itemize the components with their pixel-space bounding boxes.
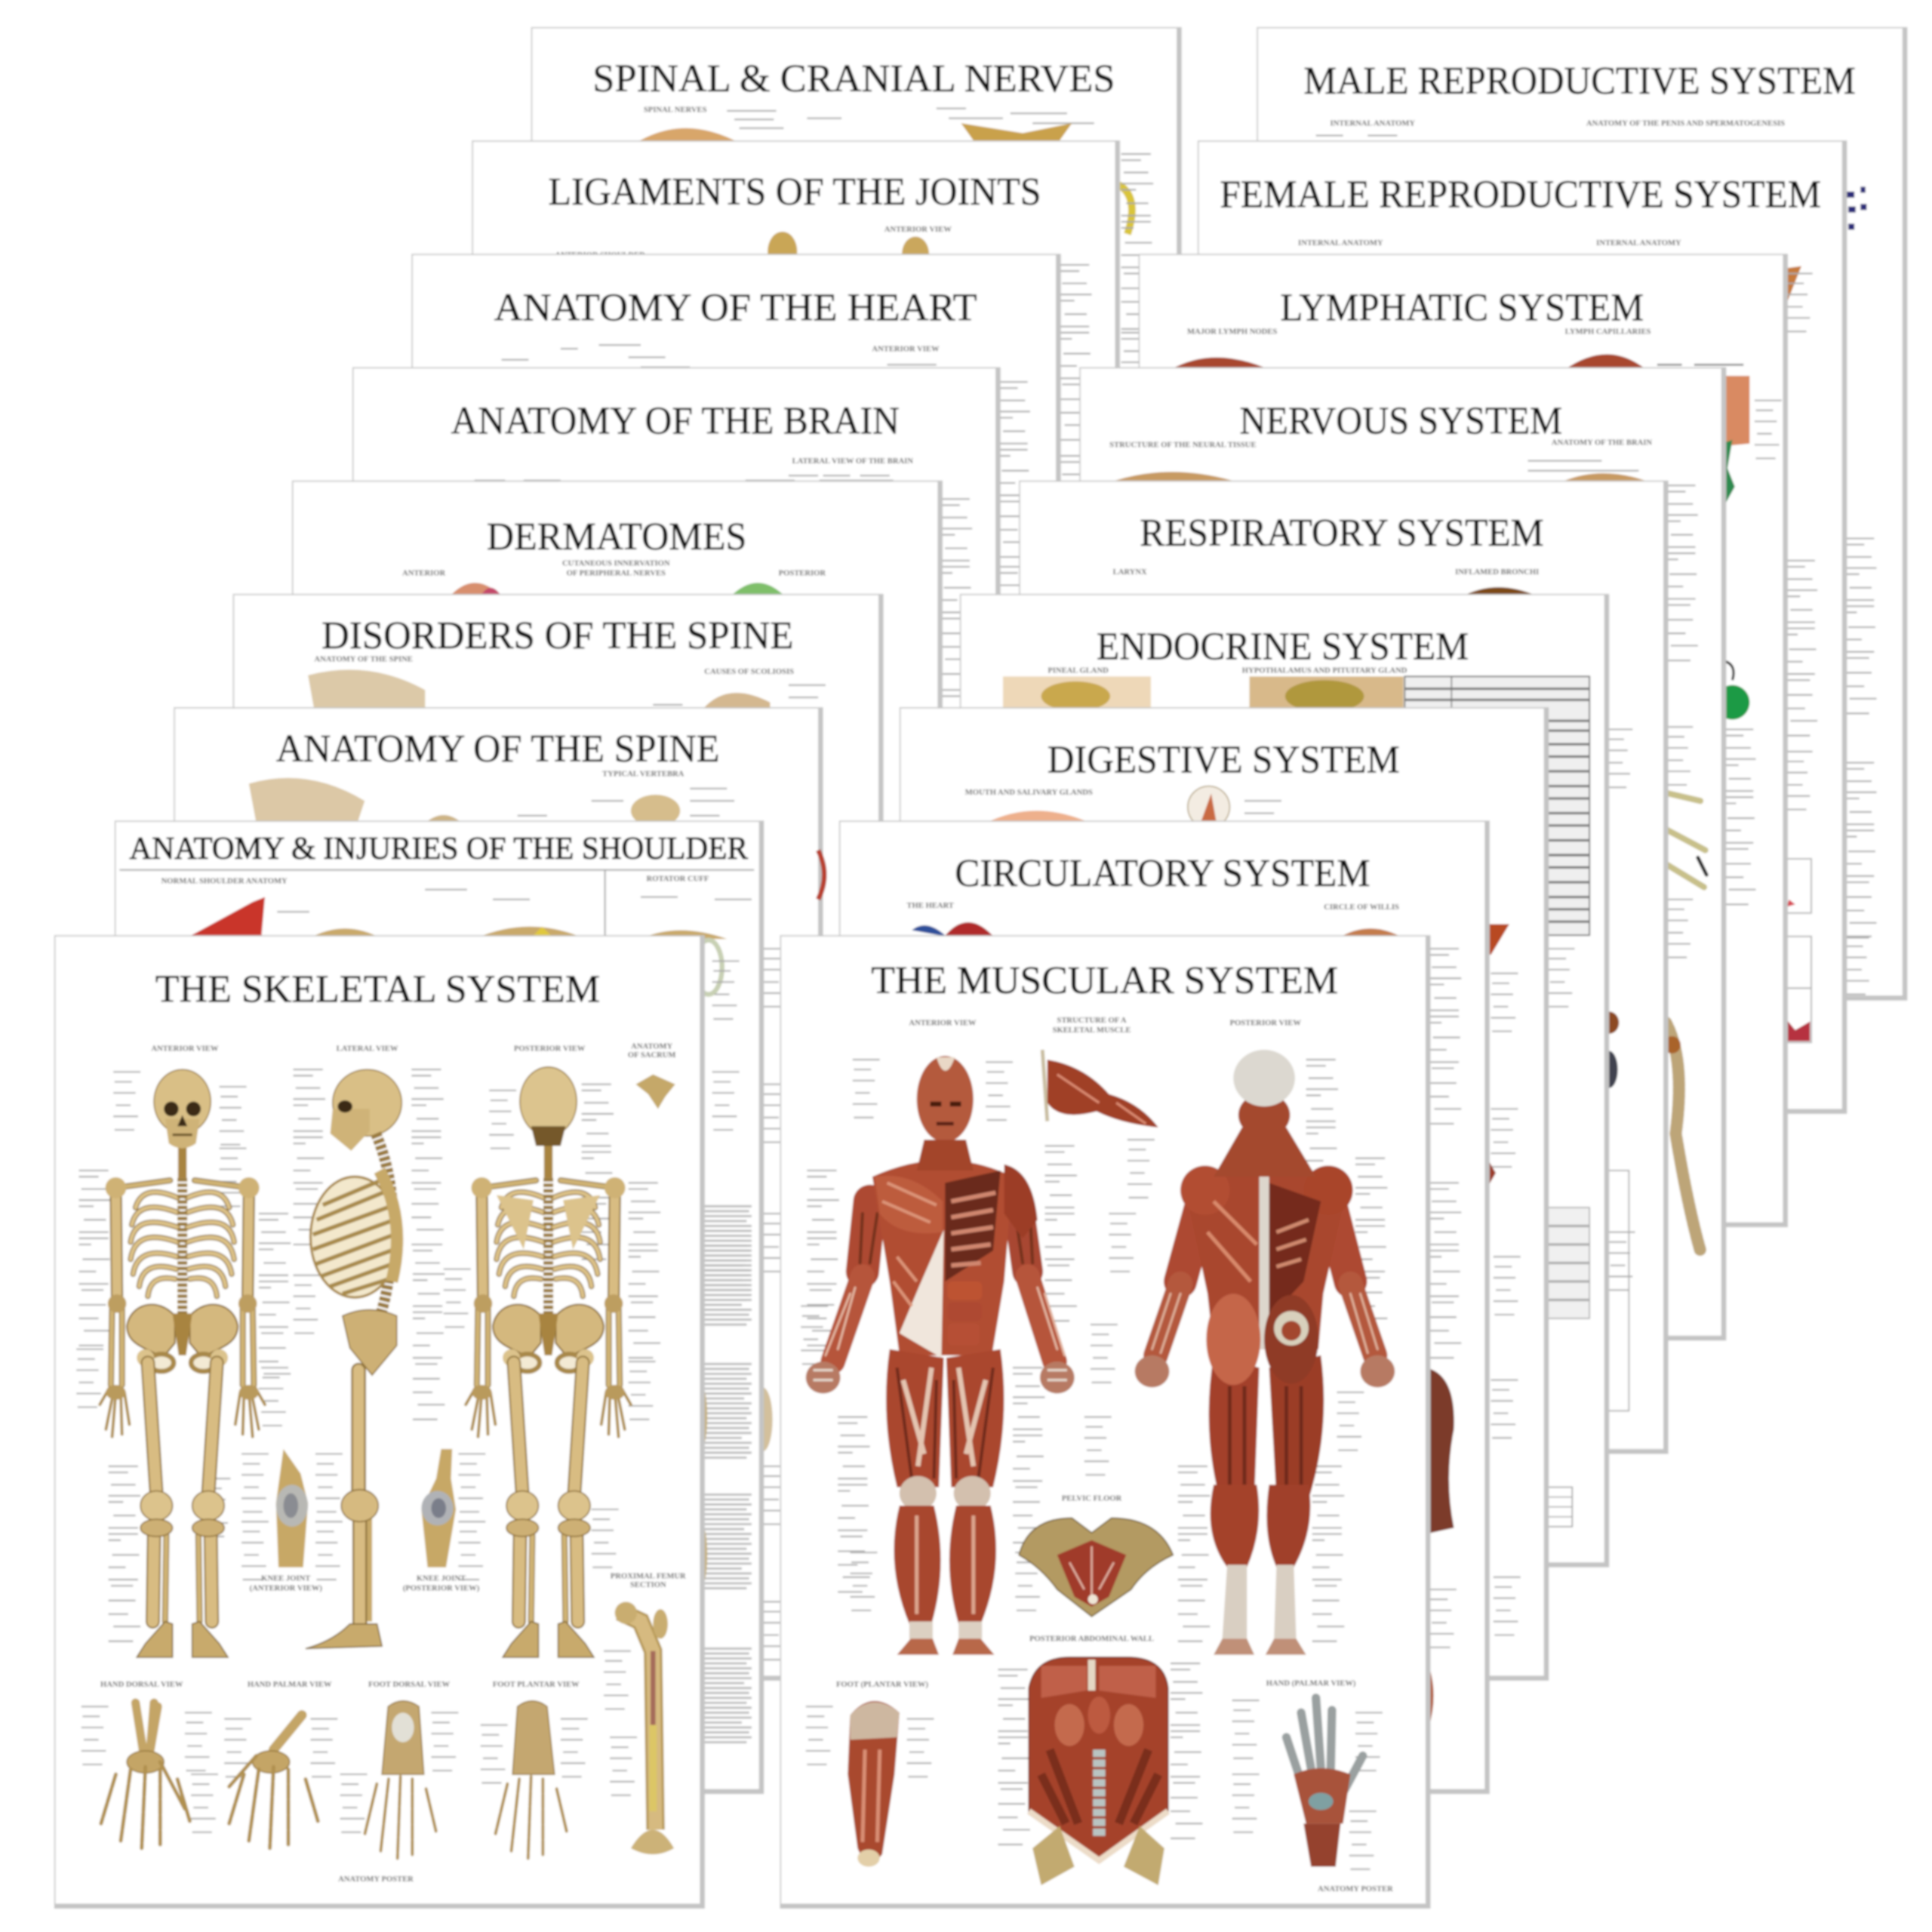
view label right: HYPOTHALAMUS AND PITUITARY GLAND [1242, 666, 1407, 675]
view label: ANATOMY OF THE SPINE [314, 656, 413, 664]
poster: anatomy of the spine [174, 707, 824, 1681]
poster: lymphatic system [1139, 254, 1788, 1227]
femur [615, 1601, 674, 1854]
poster: circulatory system [839, 820, 1490, 1794]
hand muscles [1286, 1698, 1363, 1866]
title: FEMALE REPRODUCTIVE SYSTEM [1220, 172, 1821, 216]
view headings: ANATOMY POSTER [1318, 1885, 1393, 1894]
view headings [100, 1042, 686, 1884]
title: DISORDERS OF THE SPINE [321, 614, 793, 657]
title: DIGESTIVE SYSTEM [1048, 738, 1400, 782]
view label right: ANATOMY OF THE BRAIN [1552, 438, 1652, 447]
hormone table [1404, 676, 1589, 935]
view headings: POSTERIOR ABDOMINAL WALL [1029, 1635, 1154, 1644]
muscle callout labels [801, 1060, 1387, 1869]
view headings: HAND PALMAR VIEW [248, 1681, 332, 1689]
title: LIGAMENTS OF THE JOINTS [549, 170, 1041, 214]
view headings: HAND DORSAL VIEW [100, 1681, 183, 1689]
view label: MAJOR LYMPH NODES [1187, 328, 1277, 336]
view headings: ANTERIOR VIEW [909, 1019, 977, 1027]
pelvic floor [1019, 1518, 1173, 1617]
muscle structure inset [1042, 1050, 1158, 1128]
title: LYMPHATIC SYSTEM [1280, 285, 1644, 329]
title: NERVOUS SYSTEM [1239, 399, 1562, 443]
title: RESPIRATORY SYSTEM [1140, 511, 1544, 555]
sacrum detail [635, 1075, 675, 1109]
title: ANATOMY OF THE HEART [494, 285, 977, 329]
view label: THE HEART [906, 902, 954, 910]
poster: digestive system [900, 707, 1549, 1681]
title: THE MUSCULAR SYSTEM [871, 958, 1338, 1002]
section label: NORMAL SHOULDER ANATOMY [162, 878, 288, 886]
poster: anatomy of the heart [411, 254, 1061, 1227]
view label: LARYNX [1113, 568, 1147, 577]
poster: endocrine system [960, 594, 1609, 1567]
view headings: ANATOMY [631, 1042, 673, 1051]
title: ENDOCRINE SYSTEM [1097, 624, 1469, 668]
title: SPINAL & CRANIAL NERVES [592, 57, 1115, 100]
view headings: ANTERIOR VIEW [151, 1045, 219, 1054]
view headings: POSTERIOR VIEW [1230, 1019, 1301, 1027]
view label: ANTERIOR SHOULDER [555, 251, 645, 260]
hand and foot bones [101, 1701, 567, 1858]
title: ANATOMY OF THE SPINE [276, 727, 719, 771]
view headings: SKELETAL MUSCLE [1053, 1026, 1131, 1035]
view headings: (POSTERIOR VIEW) [403, 1585, 480, 1593]
section label right: ROTATOR CUFF [647, 875, 709, 883]
title: ANATOMY OF THE BRAIN [451, 399, 900, 443]
view label: INTERNAL ANATOMY [1298, 239, 1383, 248]
view label right: ANATOMY OF THE PENIS AND SPERMATOGENESIS [1586, 120, 1785, 128]
title: THE SKELETAL SYSTEM [155, 967, 600, 1011]
view headings: HAND (PALMAR VIEW) [1266, 1679, 1356, 1687]
poster: respiratory system [1019, 481, 1669, 1454]
view label right: POSTERIOR [779, 569, 826, 577]
view label: MOUTH AND SALIVARY GLANDS [965, 789, 1093, 797]
organ fragments [1599, 1011, 1635, 1411]
poster: spinal and cranial nerves [531, 27, 1182, 1001]
lateral skeleton [306, 1069, 401, 1648]
view headings: KNEE JOINT [261, 1575, 310, 1583]
view headings: OF SACRUM [628, 1051, 675, 1060]
view headings: STRUCTURE OF A [1057, 1017, 1127, 1025]
view label right: CIRCLE OF WILLIS [1324, 903, 1399, 912]
view labels: ANTERIOR [402, 569, 446, 577]
title: DERMATOMES [487, 515, 746, 558]
view headings: FOOT (PLANTAR VIEW) [836, 1681, 928, 1689]
posterior abdominal wall [1029, 1657, 1168, 1885]
poster: ligaments of the joints [472, 140, 1120, 1114]
view label centre 2: OF PERIPHERAL NERVES [567, 569, 666, 577]
lower table [1545, 1208, 1589, 1527]
title: ANATOMY & INJURIES OF THE SHOULDER [129, 831, 749, 866]
view headings: PELVIC FLOOR [1062, 1495, 1122, 1503]
view headings: FOOT DORSAL VIEW [368, 1681, 450, 1689]
view label right: INFLAMED BRONCHI [1455, 568, 1539, 577]
foot muscles [848, 1701, 900, 1866]
skeleton callout labels [76, 1069, 660, 1832]
poster: dermatomes [292, 481, 943, 1454]
view label: INTERNAL ANATOMY [1331, 120, 1415, 128]
organ strip [1715, 376, 1782, 904]
organ fragment [1783, 266, 1801, 313]
poster: the skeletal system [54, 935, 705, 1909]
poster: nervous system [1079, 368, 1726, 1340]
poster: disorders of the spine [233, 594, 884, 1567]
view headings [836, 1017, 1393, 1894]
organ fragments [1426, 1367, 1454, 1737]
bone and nerve fragments [1663, 789, 1706, 1251]
view headings: FOOT PLANTAR VIEW [493, 1681, 580, 1689]
poster: anatomy of the brain [352, 368, 1001, 1340]
view label right: INTERNAL ANATOMY [1596, 239, 1681, 248]
view headings: SECTION [630, 1581, 666, 1589]
posterior muscular figure [1135, 1050, 1395, 1655]
view headings: KNEE JOINT [417, 1575, 466, 1583]
poster: male reproductive system [1257, 27, 1907, 1001]
view headings: LATERAL VIEW [337, 1045, 398, 1054]
view label right: CAUSES OF SCOLIOSIS [704, 668, 794, 676]
view label: ANTERIOR VIEW [884, 226, 952, 234]
view label: SPINAL NERVES [644, 106, 707, 115]
anterior muscular figure [806, 1056, 1075, 1655]
view label: STRUCTURE OF THE NEURAL TISSUE [1109, 441, 1257, 450]
knee joint details [276, 1449, 456, 1567]
view headings: PROXIMAL FEMUR [611, 1572, 686, 1580]
view label: TYPICAL VERTEBRA [602, 771, 685, 779]
view label: PINEAL GLAND [1048, 666, 1109, 675]
view label: LATERAL VIEW OF THE BRAIN [792, 457, 913, 466]
view headings: ANATOMY POSTER [338, 1875, 414, 1884]
anterior skeleton [100, 1069, 265, 1657]
view headings: (ANTERIOR VIEW) [250, 1585, 322, 1593]
view label centre: CUTANEOUS INNERVATION [562, 559, 670, 568]
view label right: LYMPH CAPILLARIES [1565, 328, 1651, 336]
posterior skeleton [466, 1067, 631, 1657]
title: MALE REPRODUCTIVE SYSTEM [1303, 59, 1856, 103]
poster: anatomy and injuries of the shoulder [115, 820, 764, 1794]
poster: female reproductive system [1198, 140, 1847, 1114]
inset boxes [1774, 859, 1811, 1042]
title: CIRCULATORY SYSTEM [955, 851, 1371, 895]
view headings: POSTERIOR VIEW [514, 1045, 586, 1054]
view label: ANTERIOR VIEW [872, 345, 940, 353]
poster: the muscular system [780, 935, 1431, 1909]
